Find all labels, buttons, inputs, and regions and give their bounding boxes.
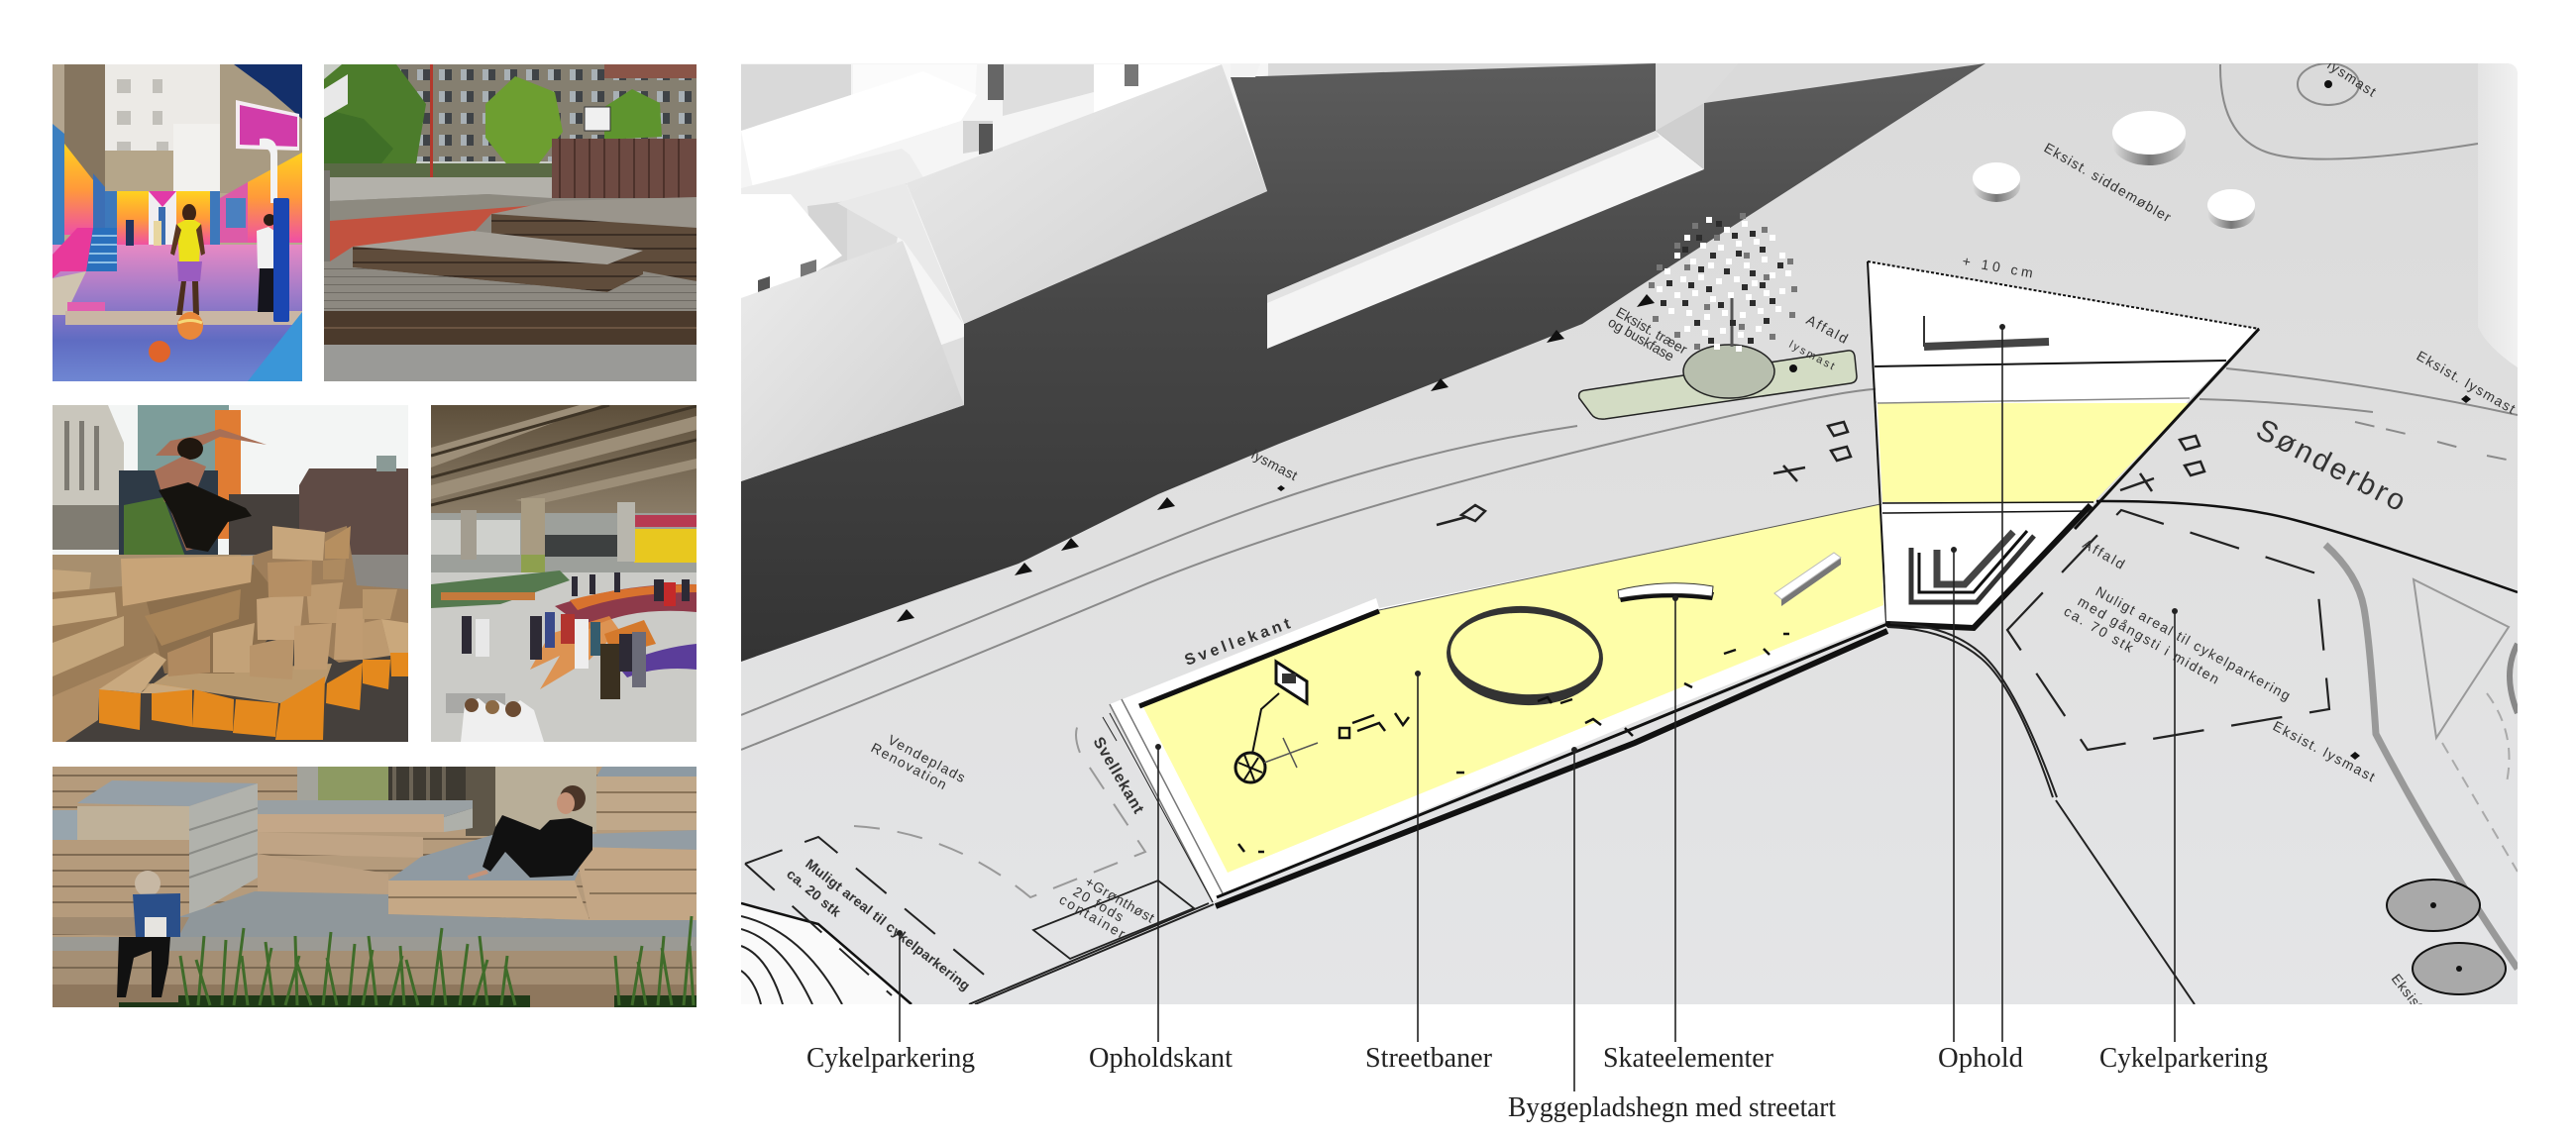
lamp posts: [1277, 395, 2471, 760]
seated child: [117, 871, 180, 997]
caption: Streetbaner: Streetbaner: [1365, 1043, 1493, 1074]
map annotations: Sønderbro: [2251, 413, 2411, 518]
caption: Skateelementer: Skateelementer: [1603, 1043, 1774, 1074]
caption: Byggepladshegn med streetart: Byggepladshegn med streetart: [1508, 1092, 1836, 1123]
left logs: [53, 570, 161, 742]
low steps: [180, 891, 697, 937]
small court markings: [1238, 634, 1789, 852]
big block: [77, 780, 258, 806]
map annotations: Eksist.: [2389, 971, 2429, 1016]
caption: Cykelparkering right: Cykelparkering: [2099, 1043, 2268, 1074]
central steps: [258, 800, 473, 817]
small lamp circle: [2298, 63, 2359, 105]
map annotations: Svellekant: [1183, 615, 1293, 670]
photo: parkour on wooden blocks: [53, 405, 408, 742]
streetbaner: yellow court: [1110, 504, 1887, 906]
site model map: [741, 56, 2519, 1016]
basketball hoop symbol: [1235, 662, 1318, 782]
leader: cykelparkering right: [2172, 608, 2178, 1042]
lower deck: [324, 261, 697, 311]
map annotations: lysmast: [2324, 56, 2379, 100]
right building wall: [2478, 63, 2518, 367]
map annotations: med gångsti i midten: [2075, 593, 2222, 687]
map annotations: Affald: [1804, 312, 1851, 347]
map annotations: lysmast: [1787, 339, 1836, 372]
map annotations: Muligt areal til cykelparkering: [803, 856, 973, 993]
road curves right: [2096, 501, 2518, 969]
leader: streetbaner: [1415, 671, 1421, 1042]
map annotations: Eksist. lysmast: [2414, 348, 2519, 417]
photo: wooden decks and sports court: [324, 64, 697, 381]
map annotations: +Grønthøst: [1082, 874, 1157, 926]
map annotations: container: [1056, 891, 1128, 942]
leader: ophold upper: [1999, 324, 2005, 1042]
road edge double line: [969, 623, 2195, 1004]
direction arrows: [897, 294, 1655, 622]
photo: street art under a motorway bridge: [431, 405, 697, 742]
map annotations: Affald: [2081, 536, 2127, 572]
caption: Opholdskant: Opholdskant: [1089, 1043, 1233, 1074]
skate elements: [1618, 553, 1841, 606]
dark facades: [741, 63, 1986, 662]
orange block faces: [99, 653, 408, 740]
crowd: [462, 572, 690, 699]
map annotations: lysmast: [1249, 447, 1300, 483]
person in white: [257, 214, 273, 312]
leader: opholdskant: [1155, 744, 1161, 1042]
seated woman in black: [468, 785, 592, 880]
map annotations: [784, 56, 2519, 1016]
road lines: [741, 64, 2518, 750]
middle step: [353, 231, 643, 264]
map annotations: Eksist. træer: [1613, 304, 1690, 358]
green planter: [1579, 345, 1857, 419]
map annotations: Eksist. lysmast: [2271, 718, 2378, 784]
map annotations: Vendeplads: [886, 732, 968, 785]
upper step: [491, 197, 697, 228]
basketballs: [149, 312, 203, 363]
map annotations: ca. 70 stk: [2061, 603, 2137, 656]
photo: colourful basketball court: [53, 64, 302, 381]
map annotations: Nuligt areal til cykelparkering: [2093, 583, 2293, 703]
seat with woman: [388, 834, 594, 881]
dashed cycle parking area right: [2007, 510, 2329, 750]
existing seating discs: [1973, 111, 2255, 229]
existing trees grey circles: [2387, 880, 2506, 994]
bike and pedestrian symbols: [1437, 422, 2204, 525]
white window strip: [1267, 131, 1704, 349]
tree: [1649, 216, 1797, 349]
roofs: [741, 241, 964, 481]
map annotations: ca. 20 stk: [784, 866, 844, 920]
lower white plaza with stepped seating: [1882, 502, 2093, 628]
timber pile: [121, 526, 408, 703]
parkour jumper: [155, 429, 267, 552]
caption: Ophold: Ophold: [1938, 1043, 2023, 1074]
buildings: [741, 63, 1986, 662]
map annotations: Renovation: [869, 740, 949, 792]
map annotations: Eksist. siddemøbler: [2041, 140, 2174, 225]
leader: cykelparkering left: [897, 930, 903, 1042]
leader: ophold lower: [1951, 547, 1957, 1042]
dashed cycle parking area left: [745, 837, 1001, 995]
photo: timber seating steps: [53, 767, 697, 1007]
ground plane: [741, 63, 2518, 1004]
leader lines: [897, 324, 2178, 1091]
right blocks: [596, 777, 697, 830]
ring element: [1444, 602, 1606, 709]
map annotations: 20 fods: [1070, 883, 1127, 925]
bench element: [1923, 316, 1925, 347]
leader: byggepladshegn: [1571, 747, 1577, 1091]
player in yellow: [170, 204, 205, 315]
container outline and dashed turning area: [854, 713, 1213, 959]
caption: Cykelparkering: Cykelparkering: [806, 1043, 975, 1074]
reeds: [119, 916, 697, 1007]
map annotations: og buskfase: [1605, 314, 1677, 364]
ophold trapezoid with yellow: [1868, 261, 2259, 624]
leader: skateelementer: [1672, 595, 1678, 1042]
map annotations: Svellekant: [1090, 735, 1147, 817]
bottom-left white contour area: [741, 903, 912, 1004]
map annotations: + 10 cm: [1961, 253, 2034, 280]
